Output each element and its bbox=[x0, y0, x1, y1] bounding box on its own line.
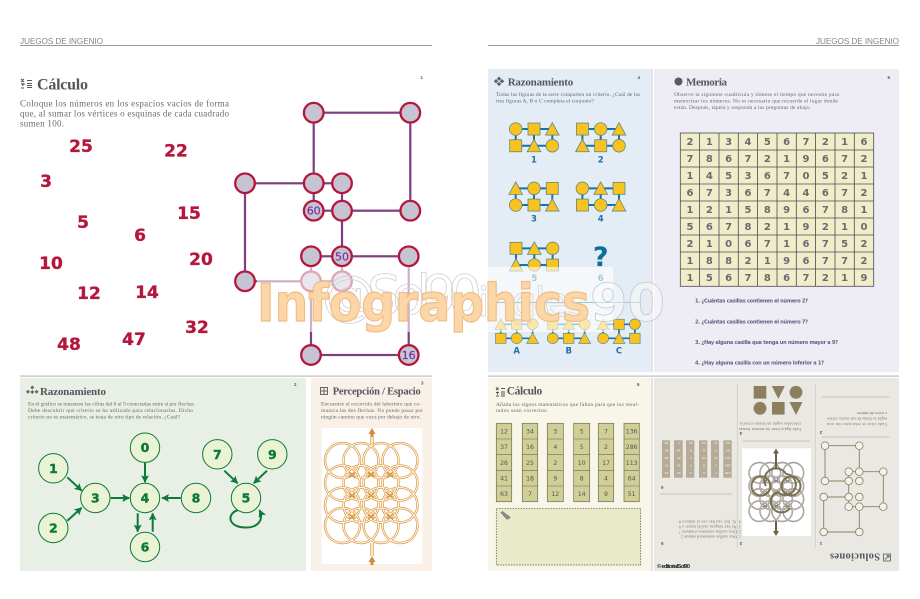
number columns: 12 bbox=[551, 491, 559, 498]
solution numbers: 2 bbox=[819, 430, 822, 435]
loose numbers: 10 bbox=[39, 254, 63, 274]
solution number table: 10 bbox=[702, 456, 706, 460]
node numbers: 1 bbox=[49, 461, 58, 476]
number columns: 17 bbox=[602, 460, 610, 467]
instructions text: Observe la siguiente cuadrícula y tómese el tiempo que necesite para bbox=[674, 92, 840, 98]
heading: Razonamiento: Razonamiento bbox=[508, 76, 574, 88]
figure 3: 3 bbox=[531, 215, 537, 225]
upside-down text 2: o rectos del número bbox=[857, 411, 887, 415]
option A: A bbox=[513, 346, 520, 356]
panel: soluciones bbox=[652, 378, 899, 571]
number columns: 10 bbox=[578, 460, 586, 467]
number grid: 7867219672 bbox=[687, 154, 868, 165]
node numbers: 9 bbox=[268, 447, 277, 462]
number columns: 4 bbox=[553, 444, 557, 451]
instructions text bbox=[28, 400, 196, 420]
panel: cálculo number graph bbox=[20, 75, 424, 365]
solution number table: 3 bbox=[690, 471, 692, 475]
heading: Cálculo: Cálculo bbox=[507, 386, 542, 398]
questions: 3. ¿Hay alguna casilla que tenga un número mayor a 9? bbox=[695, 339, 838, 346]
number grid: 1453670521 bbox=[687, 171, 868, 182]
squares diagram: 50 bbox=[335, 250, 349, 263]
dashed answer box bbox=[496, 508, 641, 565]
page number: 5 bbox=[888, 75, 890, 80]
number columns: 25 bbox=[526, 460, 534, 467]
figure 4: 4 bbox=[598, 215, 604, 225]
number columns: 7 bbox=[604, 428, 608, 435]
instructions text: ningún camino que vaya por debajo de otro. bbox=[321, 414, 422, 420]
number columns: 64 bbox=[628, 476, 636, 482]
solution number table: 7 bbox=[715, 471, 717, 475]
instructions text: están. Después, tápela y responda a las preguntas de abajo. bbox=[674, 105, 812, 111]
node numbers: 0 bbox=[141, 440, 150, 455]
number columns: 136 bbox=[626, 428, 638, 435]
figure 3 bbox=[509, 182, 559, 225]
number columns: 3 bbox=[553, 428, 557, 435]
heading: Percepción / Espacio: Percepción / Espacio bbox=[333, 386, 421, 398]
number columns: 2 bbox=[604, 444, 608, 451]
number grid: 2106716752 bbox=[687, 239, 868, 250]
solution number table: 9 bbox=[715, 441, 717, 445]
loose numbers: 15 bbox=[177, 204, 201, 224]
upside-down text 4: colocadas según un mismo criterio. bbox=[739, 422, 801, 426]
squares diagram bbox=[235, 103, 420, 365]
solution shapes bbox=[754, 386, 802, 415]
figure 1 bbox=[509, 123, 559, 165]
solution number table: 37 bbox=[665, 464, 668, 468]
upside-down text 4: Cada figura tiene las mismas formas bbox=[738, 427, 801, 431]
loose numbers: 14 bbox=[135, 283, 159, 303]
solution number table: 4 bbox=[690, 464, 692, 468]
icon: pencil bbox=[500, 511, 510, 520]
panel: razonamiento green bbox=[20, 378, 306, 571]
upside-down text 2: Cada cifra se relaciona con otra bbox=[827, 422, 887, 426]
node numbers: 8 bbox=[192, 490, 200, 506]
page number: 1 bbox=[420, 75, 424, 80]
instructions text: Debe descubrir qué criterio se ha utilizado para relacionarlas. Dicho bbox=[28, 408, 193, 414]
page number: 2 bbox=[294, 382, 297, 387]
figure 5 bbox=[509, 242, 559, 284]
figure 6 question mark: 6 bbox=[598, 274, 604, 284]
instructions text: tres figuras A, B o C completa el conjunto? bbox=[496, 98, 595, 104]
solution number table: 2 bbox=[715, 464, 717, 468]
number columns: 26 bbox=[500, 460, 508, 467]
figure 2 bbox=[576, 123, 626, 165]
panel: razonamiento blue bbox=[488, 69, 651, 372]
option C: C bbox=[616, 346, 622, 356]
number columns: 4 bbox=[604, 476, 608, 482]
loose numbers: 20 bbox=[189, 250, 213, 270]
credit: © editorialSol90 bbox=[657, 563, 690, 570]
option B bbox=[547, 319, 591, 356]
instructions text: Coloque los números en los espacios vacíos de forma bbox=[20, 98, 229, 108]
watermark: ingles bbox=[478, 280, 588, 326]
upside-down text 2: según la forma de sus trazos curvos bbox=[826, 416, 887, 420]
solution number table: 113 bbox=[725, 456, 731, 460]
upside-down text 5: 2. Doce casillas contienen el número 7 bbox=[679, 530, 741, 534]
instructions text: munica las dos flechas. No puede pasar por bbox=[321, 407, 423, 414]
number grid: 2134567216 bbox=[687, 137, 868, 148]
option B: B bbox=[565, 346, 572, 356]
solution number table: 41 bbox=[665, 448, 668, 452]
loose numbers: 32 bbox=[185, 318, 209, 338]
instructions text: tados sean correctos. bbox=[496, 408, 549, 414]
number grid: 1215896781 bbox=[687, 205, 868, 216]
separator right bbox=[488, 376, 899, 377]
number columns: 9 bbox=[553, 476, 557, 482]
instructions text bbox=[674, 92, 840, 111]
number columns: 7 bbox=[528, 491, 532, 498]
solution numbers: 6 bbox=[660, 485, 664, 490]
loose numbers: 22 bbox=[164, 142, 188, 162]
number columns: 5 bbox=[580, 444, 584, 451]
solution number table: 25 bbox=[677, 456, 681, 460]
solution number table: 8 bbox=[703, 448, 705, 452]
node numbers: 6 bbox=[141, 540, 150, 554]
solution number table: 16 bbox=[677, 464, 681, 468]
number columns: 5 bbox=[580, 428, 584, 435]
questions bbox=[695, 298, 838, 366]
solution maze bbox=[742, 448, 811, 536]
upside-down text 2 bbox=[826, 411, 887, 426]
solution number table: 34 bbox=[677, 471, 681, 475]
number grid bbox=[680, 133, 874, 286]
number columns: 14 bbox=[578, 491, 586, 498]
instructions text bbox=[496, 91, 640, 104]
solution number table: 26 bbox=[665, 456, 668, 460]
figure 5: 5 bbox=[531, 274, 537, 284]
number columns: 12 bbox=[500, 428, 508, 435]
instructions text: sumen 100. bbox=[20, 118, 64, 128]
loose numbers: 12 bbox=[77, 284, 101, 304]
number columns: 18 bbox=[526, 476, 534, 482]
loose numbers: 48 bbox=[57, 335, 81, 355]
solution number table: 17 bbox=[714, 456, 718, 460]
node numbers: 3 bbox=[91, 490, 100, 506]
loose numbers: 5 bbox=[77, 213, 89, 233]
number columns: 37 bbox=[500, 444, 508, 451]
solution number table: 18 bbox=[677, 448, 681, 452]
squares diagram: 60 bbox=[307, 205, 321, 218]
solution number table: 2 bbox=[690, 456, 692, 460]
number columns: 113 bbox=[626, 460, 638, 467]
page number: 4 bbox=[638, 75, 640, 80]
number nodes bbox=[39, 433, 287, 562]
upside-down heading: Soluciones: Soluciones bbox=[830, 550, 880, 562]
watermark: @Sol90 bbox=[322, 264, 482, 327]
upside-down text 5: 3. No hay ninguna casilla mayor a 9 bbox=[679, 524, 741, 528]
solution numbers: 5 bbox=[660, 541, 664, 546]
figure 1: 1 bbox=[531, 155, 537, 165]
solution number table: 51 bbox=[726, 441, 730, 445]
figure 6 question mark: ? bbox=[593, 242, 609, 273]
number columns: 9 bbox=[604, 491, 608, 498]
instructions text: Añada los signos matemáticos que faltan para que los resul- bbox=[496, 401, 639, 408]
watermark: Infographics bbox=[257, 274, 590, 334]
number grid: 5678219210 bbox=[687, 222, 868, 233]
node numbers: 4 bbox=[141, 490, 150, 506]
instructions text: criterio no es matemático, se trata de otro tipo de relación. ¿Cuál? bbox=[28, 414, 181, 420]
solution number table: 7 bbox=[678, 441, 680, 445]
upside-down text 5: 4. Sí, hay casillas con el número 0 bbox=[679, 518, 741, 524]
instructions text bbox=[20, 98, 230, 128]
node numbers: 2 bbox=[49, 520, 58, 536]
solution graph bbox=[820, 442, 887, 536]
instructions text: Todas las figuras de la serie comparten un criterio. ¿Cuál de las bbox=[496, 91, 640, 98]
heading: Cálculo: Cálculo bbox=[37, 76, 88, 94]
solution numbers: 1 bbox=[819, 541, 822, 546]
solution number table: 14 bbox=[702, 441, 706, 445]
solution number table: 64 bbox=[726, 448, 730, 452]
questions: 2. ¿Cuántas casillas contienen el número 7? bbox=[695, 319, 808, 326]
questions: 4. ¿Hay alguna casilla con un número inferior a 1? bbox=[695, 360, 824, 366]
instructions text bbox=[321, 402, 423, 420]
solution number table: 5 bbox=[703, 464, 705, 468]
maze bbox=[322, 428, 422, 565]
squares diagram: 16 bbox=[402, 349, 416, 362]
number columns: 286 bbox=[626, 444, 638, 451]
upside-down text 5: 1. Once casillas contienen el número 2 bbox=[681, 534, 741, 538]
panel: memoria bbox=[652, 69, 899, 372]
heading: Razonamiento: Razonamiento bbox=[40, 386, 106, 398]
loose numbers: 47 bbox=[122, 330, 146, 350]
number columns: 2 bbox=[553, 460, 557, 467]
solution number table bbox=[662, 440, 732, 478]
solution number table: 5 bbox=[703, 471, 705, 475]
number columns: 8 bbox=[580, 476, 584, 482]
number grid: 1882196772 bbox=[687, 256, 868, 267]
instructions text bbox=[496, 401, 639, 414]
solution numbers: 3 bbox=[739, 541, 742, 546]
arrows bbox=[67, 463, 267, 532]
number columns: 63 bbox=[500, 491, 508, 498]
solution number table: 136 bbox=[725, 471, 731, 475]
loose numbers: 6 bbox=[134, 226, 146, 246]
solution number table: 12 bbox=[689, 441, 693, 445]
solution number table: 286 bbox=[725, 464, 731, 468]
instructions text: que, al sumar los vértices o esquinas de cada cuadrado bbox=[20, 108, 230, 118]
number grid: 6736744672 bbox=[687, 188, 868, 199]
figure 2: 2 bbox=[598, 155, 604, 165]
upside-down text 4 bbox=[738, 422, 801, 431]
solution numbers bbox=[660, 430, 822, 546]
header right: JUEGOS DE INGENIO bbox=[816, 37, 899, 46]
solution number table: 63 bbox=[665, 441, 668, 445]
questions: 1. ¿Cuántas casillas contienen el número 2? bbox=[695, 298, 808, 305]
node numbers: 5 bbox=[242, 490, 250, 506]
page number: 6 bbox=[637, 382, 640, 387]
panel: cálculo signos bbox=[488, 378, 651, 571]
number columns bbox=[496, 423, 639, 502]
loose numbers: 25 bbox=[69, 137, 93, 157]
solution number table: 4 bbox=[715, 448, 717, 452]
figure 4 bbox=[576, 182, 626, 225]
option A bbox=[495, 319, 539, 356]
solution numbers: 4 bbox=[739, 431, 742, 436]
node numbers: 7 bbox=[213, 447, 222, 462]
solution number table: 12 bbox=[665, 471, 668, 475]
number columns: 41 bbox=[500, 476, 508, 482]
number columns: 34 bbox=[526, 428, 534, 435]
separator left bbox=[20, 376, 432, 377]
instructions text: Encuentre el recorrido del laberinto que co- bbox=[321, 402, 421, 408]
panel: percepción espacio bbox=[311, 378, 432, 571]
loose numbers: 3 bbox=[40, 172, 52, 192]
page number: 3 bbox=[421, 380, 424, 386]
option C bbox=[597, 319, 640, 356]
loose numbers bbox=[39, 137, 213, 355]
instructions text: En el gráfico se muestran las cifras del 0 al 9 conectadas entre sí por flechas. bbox=[28, 400, 196, 408]
number columns: 51 bbox=[628, 491, 636, 498]
upside-down text 5 bbox=[679, 518, 741, 538]
node numbers bbox=[49, 440, 277, 554]
instructions text: memorizar los números. No es necesario que recuerde el lugar donde bbox=[674, 98, 839, 104]
heading: Memoria: Memoria bbox=[686, 76, 728, 88]
solution number table: 9 bbox=[690, 448, 692, 452]
header left: JUEGOS DE INGENIO bbox=[20, 37, 103, 46]
number grid: 1567867219 bbox=[687, 273, 868, 284]
number columns: 16 bbox=[526, 444, 534, 451]
watermark: 90 bbox=[590, 274, 665, 334]
